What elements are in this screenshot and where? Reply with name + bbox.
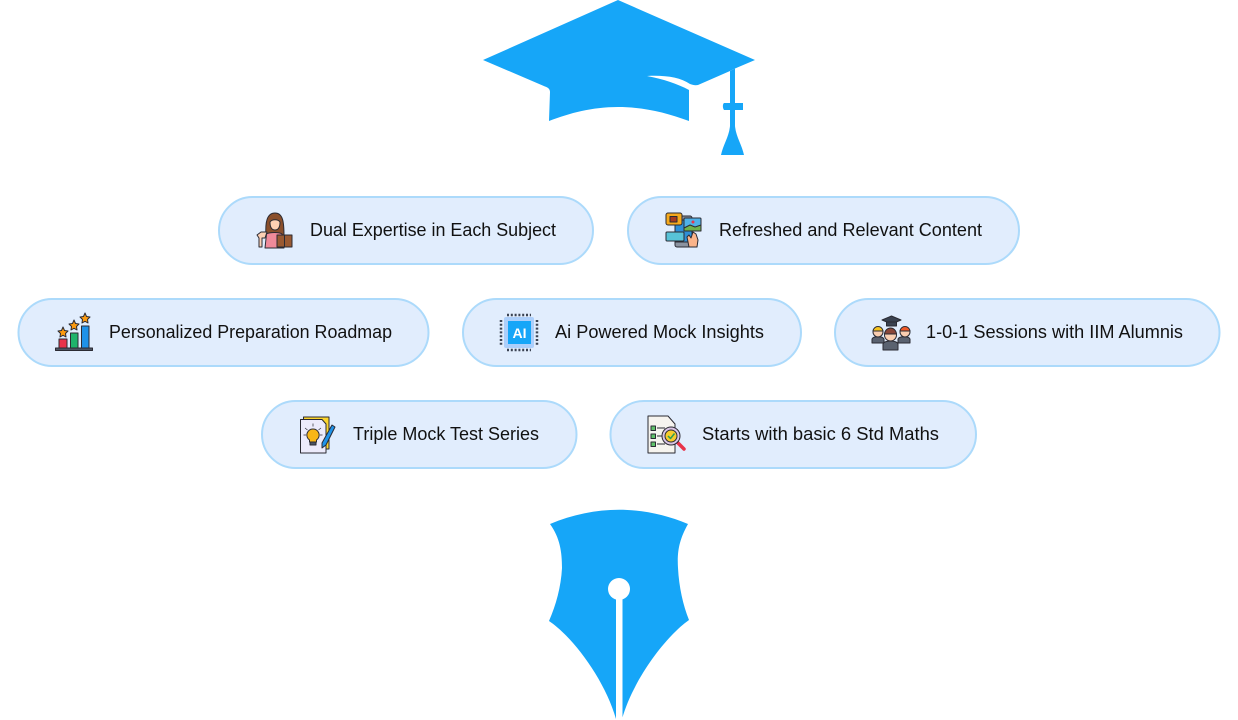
icon: phone with media bubbles (666, 213, 701, 247)
icon: graduation cap (483, 0, 755, 155)
icon: alumni group with cap (872, 316, 910, 350)
pill: Ai Powered Mock Insights (463, 299, 801, 366)
pill: Triple Mock Test Series (262, 401, 576, 468)
icon: AI chip: AI (512, 325, 526, 341)
icon: bar chart with stars (56, 313, 92, 350)
label: 1-0-1 Sessions with IIM Alumnis (926, 322, 1183, 342)
label: Starts with basic 6 Std Maths (702, 424, 939, 444)
pill: Dual Expertise in Each Subject (219, 197, 593, 264)
icon: teacher with book (257, 213, 292, 248)
pill: Starts with basic 6 Std Maths (610, 401, 976, 468)
label: Ai Powered Mock Insights (555, 322, 764, 342)
icon: fountain pen nib (549, 510, 689, 719)
icon: AI chip (501, 315, 537, 350)
icon: idea sheet and pencil (300, 417, 335, 453)
pill: Personalized Preparation Roadmap (18, 299, 428, 366)
label: Dual Expertise in Each Subject (310, 220, 556, 240)
label: Triple Mock Test Series (353, 424, 539, 444)
label: Personalized Preparation Roadmap (109, 322, 392, 342)
pill: 1-0-1 Sessions with IIM Alumnis (835, 299, 1220, 366)
icon: checklist with magnifier (648, 416, 684, 453)
label: Refreshed and Relevant Content (719, 220, 982, 240)
pill: Refreshed and Relevant Content (628, 197, 1019, 264)
